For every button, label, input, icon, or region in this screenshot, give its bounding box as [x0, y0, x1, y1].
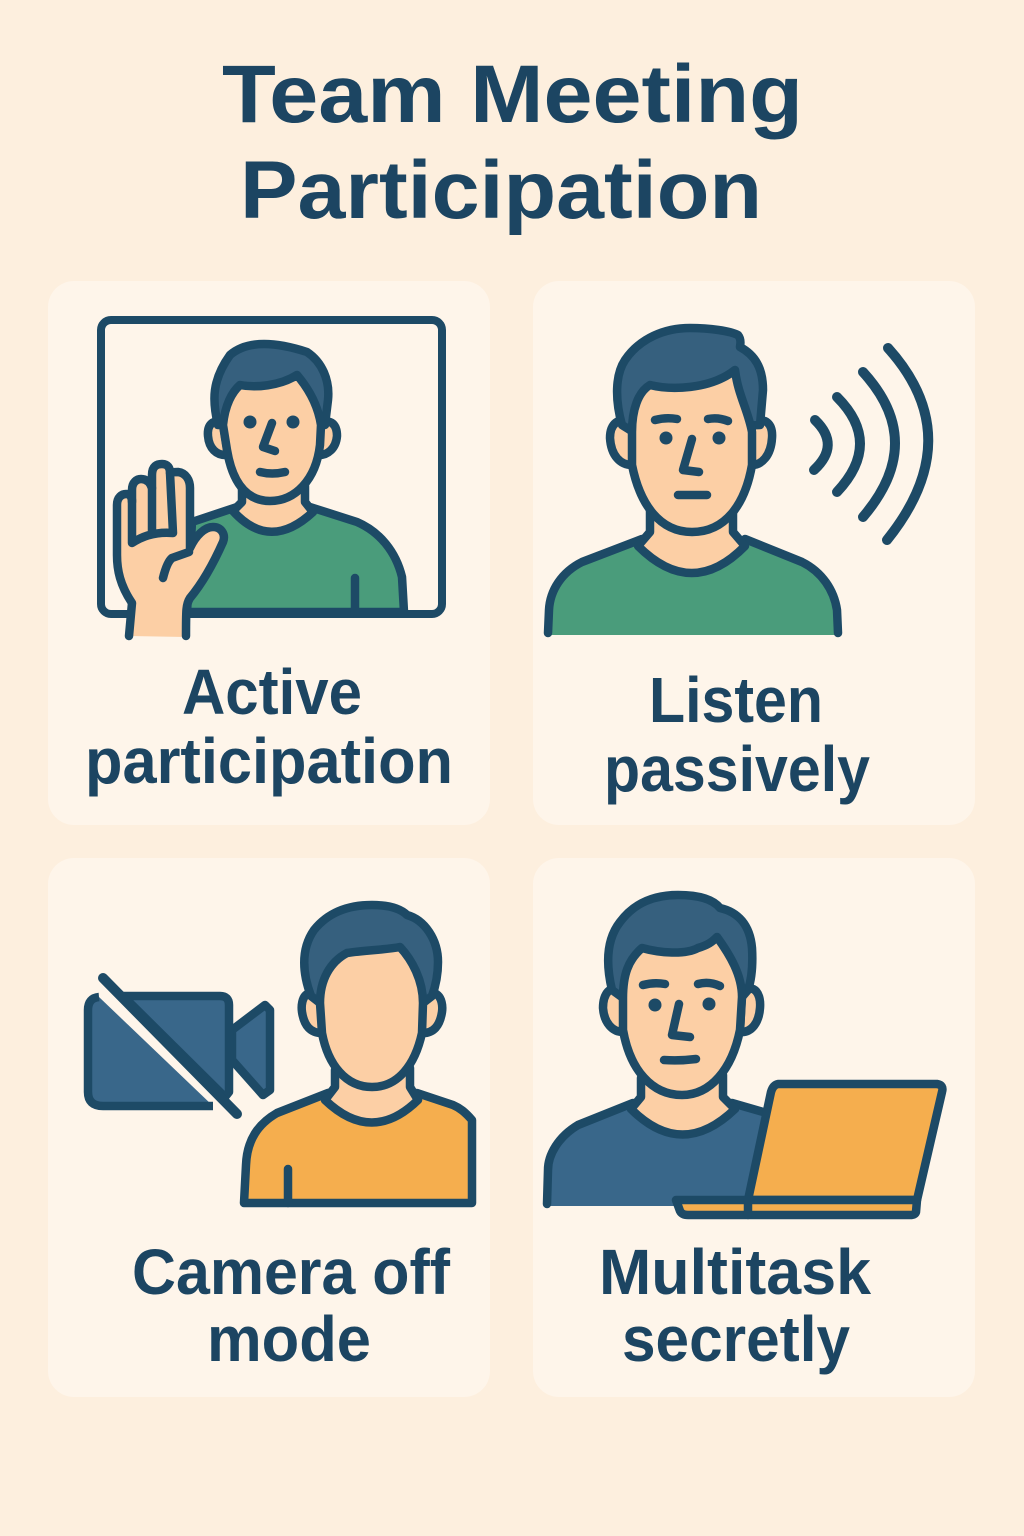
- icon: person multitasking: [547, 895, 770, 1206]
- label: listen passively: Listen: [649, 664, 823, 736]
- panel: active participation: [48, 281, 490, 825]
- icon: person listening: [548, 328, 838, 635]
- label: multitask secretly: secretly: [622, 1303, 850, 1375]
- label: camera off mode: mode: [207, 1303, 371, 1375]
- icon: raised hand: [117, 464, 224, 637]
- label: multitask secretly: [599, 1236, 871, 1375]
- icon: person waving: [187, 344, 404, 612]
- icon: laptop: [676, 1084, 942, 1215]
- icon: video frame: [101, 320, 442, 614]
- label: multitask secretly: Multitask: [599, 1236, 871, 1308]
- label: active participation: [85, 656, 453, 797]
- panel: multitask secretly: [533, 858, 975, 1397]
- panel: listen passively: [533, 281, 975, 825]
- title: Participation: [240, 145, 762, 236]
- label: camera off mode: Camera off: [132, 1236, 451, 1308]
- icon: crossed-out video camera: [88, 978, 270, 1114]
- title: Team Meeting: [222, 49, 803, 140]
- icon: sound waves: [814, 348, 928, 540]
- label: active participation: Active: [182, 656, 362, 728]
- label: active participation: participation: [85, 725, 453, 797]
- label: listen passively: passively: [604, 733, 870, 805]
- label: listen passively: [604, 664, 870, 805]
- title: [222, 49, 803, 236]
- label: camera off mode: [132, 1236, 451, 1375]
- icon: person without face: [244, 905, 472, 1203]
- panel: camera off mode: [48, 858, 490, 1397]
